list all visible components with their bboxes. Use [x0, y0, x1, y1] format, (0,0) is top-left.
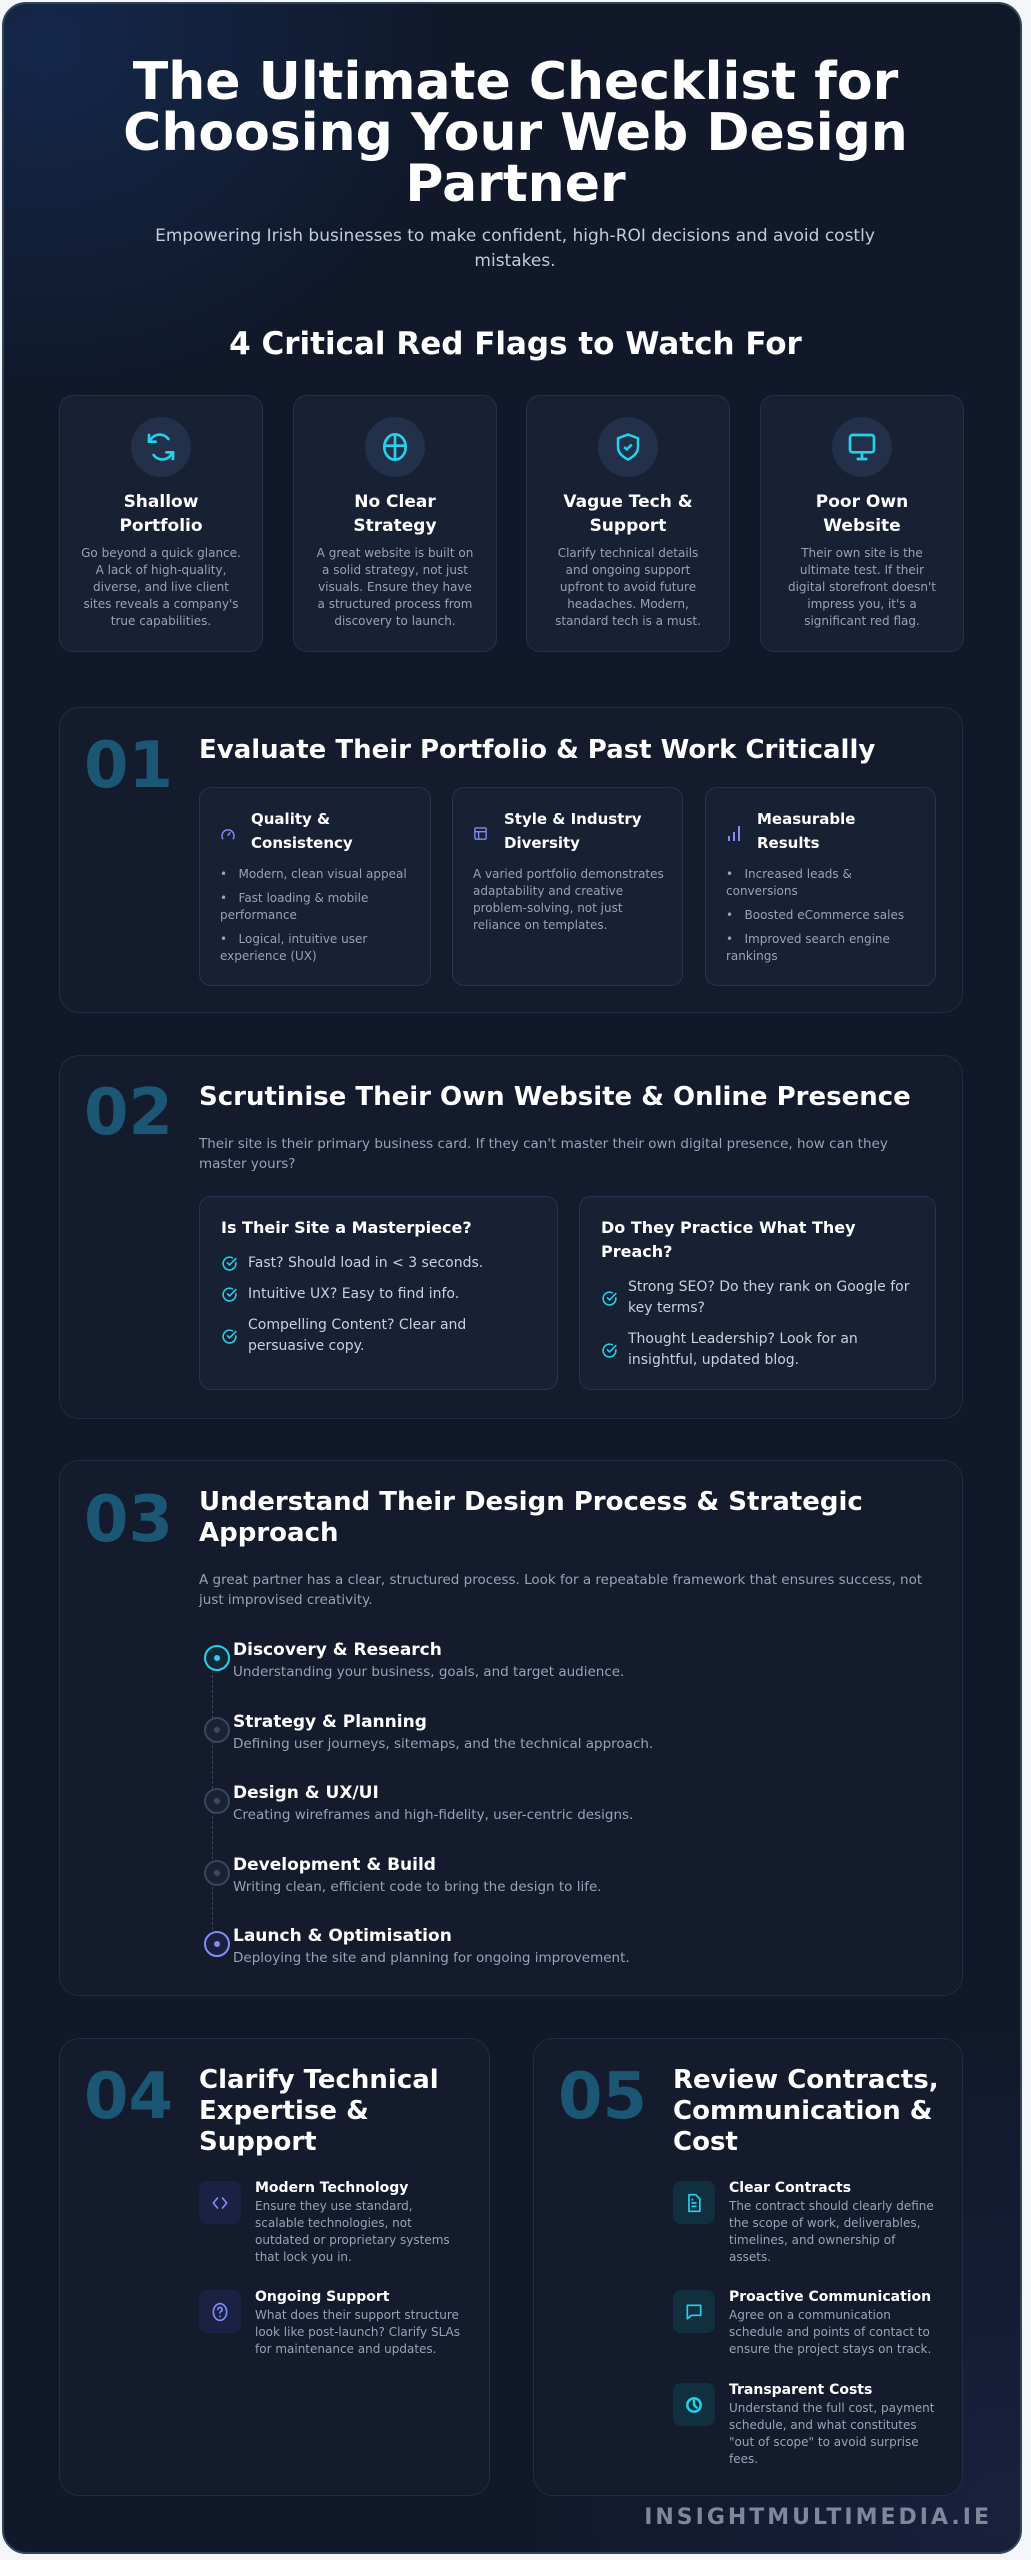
- subcard: quality: • Logical, intuitive user experience (UX): [220, 932, 367, 963]
- item: ongoing support: Ongoing Support: [255, 2289, 389, 2305]
- icon: code: [199, 2181, 241, 2224]
- subcard: style: Style & Industry: [504, 810, 642, 828]
- icon: chat: [673, 2290, 715, 2333]
- number 03: 03: [84, 1483, 173, 1557]
- item: communication: [673, 2289, 931, 2356]
- icon: clock: [673, 2383, 715, 2426]
- subcard: style: [452, 787, 683, 986]
- panel: section 01: [59, 707, 963, 1013]
- step 1: [204, 1640, 624, 1680]
- subcard: quality: [199, 787, 431, 986]
- icon: monitor: [832, 417, 892, 477]
- subcard: masterpiece: Fast? Should load in < 3 seconds.: [248, 1255, 483, 1271]
- timeline: process steps: Creating wireframes and high-fidelity, user-centric designs.: [233, 1807, 633, 1823]
- panel: red flag no clear strategy: No Clear Strategy: [353, 492, 437, 536]
- panel: section 02: [59, 1055, 963, 1419]
- subtitle: Empowering Irish businesses to make confident, high-ROI decisions and avoid costly mistakes.: [155, 226, 875, 271]
- item: clear contracts: Clear Contracts: [729, 2180, 851, 2196]
- panel: section 05: [533, 2038, 963, 2496]
- panel: red flag vague tech: [526, 395, 730, 652]
- timeline: process steps: Writing clean, efficient code to bring the design to life.: [233, 1878, 602, 1894]
- heading 04: Clarify Technical Expertise & Support: [199, 2065, 439, 2157]
- icon: bar chart: [728, 826, 740, 841]
- text: section 03 intro: A great partner has a clear, structured process. Look for a repeatable framework that ensures success, not just improvised creativity.: [199, 1572, 922, 1608]
- subcard: style: Diversity: [504, 834, 580, 852]
- footer brand: INSIGHTMULTIMEDIA.IE: [644, 2505, 992, 2530]
- timeline: process steps: Discovery & Research: [233, 1640, 442, 1660]
- panel: red flag poor website: [760, 395, 964, 652]
- heading 03: Understand Their Design Process & Strategic Approach: [199, 1487, 863, 1548]
- subcard: practice: [579, 1196, 936, 1390]
- item: modern technology: Ensure they use standard, scalable technologies, not outdated or proprietary systems that lock you in.: [255, 2199, 450, 2264]
- subcard: results: • Improved search engine rankings: [726, 932, 890, 963]
- number 05: 05: [558, 2060, 647, 2134]
- panel: section 03: [59, 1460, 963, 1996]
- subcard: practice: Thought Leadership? Look for an insightful, updated blog.: [628, 1331, 858, 1368]
- item: communication: Proactive Communication: [729, 2289, 931, 2305]
- number 01: 01: [84, 729, 173, 803]
- subcard: quality: • Modern, clean visual appeal: [220, 867, 407, 881]
- item: ongoing support: What does their support structure look like post-launch? Clarify SLAs for maintenance and updates.: [255, 2308, 460, 2356]
- subcard: masterpiece: Intuitive UX? Easy to find info.: [248, 1286, 459, 1302]
- panel: red flag no clear strategy: A great website is built on a solid strategy, not just visuals. Ensure they have a structured process from discovery to launch.: [317, 546, 473, 628]
- icon: shield: [598, 417, 658, 477]
- step 5: [204, 1926, 630, 1966]
- subcard: quality: Consistency: [251, 834, 353, 852]
- panel: red flag vague tech: Clarify technical details and ongoing support upfront to avoid future headaches. Modern, standard tech is a must.: [555, 546, 701, 628]
- icon: compass: [365, 417, 425, 477]
- panel: red flag shallow portfolio: Go beyond a quick glance. A lack of high-quality, diverse, and live client sites reveals a company's true capabilities.: [81, 546, 241, 628]
- subcard: results: • Boosted eCommerce sales: [726, 908, 904, 922]
- item: modern technology: [199, 2180, 450, 2264]
- timeline: process steps: [204, 1640, 653, 1966]
- heading 02: Scrutinise Their Own Website & Online Presence: [199, 1082, 911, 1112]
- icon: help: [199, 2290, 241, 2333]
- title: Choosing Your Web Design: [123, 103, 908, 163]
- item: clear contracts: [673, 2180, 934, 2264]
- item: ongoing support: [199, 2289, 460, 2356]
- item: modern technology: Modern Technology: [255, 2180, 408, 2196]
- panel: red flag vague tech: Vague Tech & Support: [563, 492, 693, 536]
- number 04: 04: [84, 2060, 173, 2134]
- item: clear contracts: The contract should clearly define the scope of work, deliverables, timelines, and ownership of assets.: [729, 2199, 934, 2264]
- subcard: results: [705, 787, 936, 986]
- item: communication: Agree on a communication schedule and points of contact to ensure the project stays on track.: [729, 2308, 931, 2356]
- timeline: process steps: Development & Build: [233, 1854, 436, 1874]
- subcard: masterpiece: Is Their Site a Masterpiece?: [221, 1218, 472, 1237]
- item: transparent costs: Transparent Costs: [729, 2382, 872, 2398]
- subcard: practice: Do They Practice What They Preach?: [601, 1218, 856, 1261]
- subcard: style: A varied portfolio demonstrates adaptability and creative problem-solving, not just reliance on templates.: [473, 867, 664, 932]
- subcard: masterpiece: Compelling Content? Clear and persuasive copy.: [248, 1317, 466, 1354]
- timeline: process steps: Launch & Optimisation: [233, 1926, 452, 1946]
- heading 01: Evaluate Their Portfolio & Past Work Critically: [199, 735, 875, 765]
- timeline: process steps: Strategy & Planning: [233, 1712, 427, 1732]
- panel: section 04: [59, 2038, 490, 2496]
- number 02: 02: [84, 1076, 173, 1150]
- icon: refresh: [131, 417, 191, 477]
- subcard: results: Measurable: [757, 810, 855, 828]
- panel: red flag poor website: Poor Own Website: [816, 492, 908, 536]
- item: transparent costs: [673, 2382, 934, 2466]
- icon: gauge: [221, 829, 235, 840]
- step 4: [204, 1854, 602, 1894]
- timeline: process steps: Deploying the site and planning for ongoing improvement.: [233, 1950, 630, 1966]
- text: section 02 intro: Their site is their primary business card. If they can't master their own digital presence, how can they master yours?: [199, 1136, 888, 1172]
- panel: red flag poor website: Their own site is the ultimate test. If their digital storefront doesn't impress you, it's a significant red flag.: [788, 546, 936, 628]
- icon: document: [673, 2181, 715, 2224]
- item: transparent costs: Understand the full cost, payment schedule, and what constitutes "out of scope" to avoid surprise fees.: [729, 2401, 934, 2466]
- panel: red flag shallow portfolio: [59, 395, 263, 652]
- subcard: quality: • Fast loading & mobile performance: [220, 891, 368, 922]
- icon: layout: [474, 827, 487, 840]
- heading 05: Review Contracts, Communication & Cost: [673, 2065, 939, 2157]
- step 2: [204, 1712, 653, 1752]
- subcard: practice: Strong SEO? Do they rank on Google for key terms?: [628, 1279, 909, 1316]
- title: [123, 52, 908, 214]
- subcard: masterpiece: [199, 1196, 558, 1390]
- timeline line: [212, 1665, 213, 1940]
- title: The Ultimate Checklist for: [133, 52, 898, 112]
- subcard: results: Results: [757, 834, 820, 852]
- subcard: results: • Increased leads & conversions: [726, 867, 852, 898]
- title: Partner: [405, 154, 626, 214]
- timeline: process steps: Defining user journeys, sitemaps, and the technical approach.: [233, 1736, 653, 1752]
- timeline: process steps: Design & UX/UI: [233, 1783, 379, 1803]
- panel: red flag shallow portfolio: Shallow Portfolio: [119, 492, 203, 536]
- heading: red flags: 4 Critical Red Flags to Watch For: [229, 326, 802, 362]
- subcard: quality: Quality &: [251, 810, 330, 828]
- step 3: [204, 1783, 633, 1823]
- timeline: process steps: Understanding your business, goals, and target audience.: [233, 1664, 624, 1680]
- panel: red flag no clear strategy: [293, 395, 497, 652]
